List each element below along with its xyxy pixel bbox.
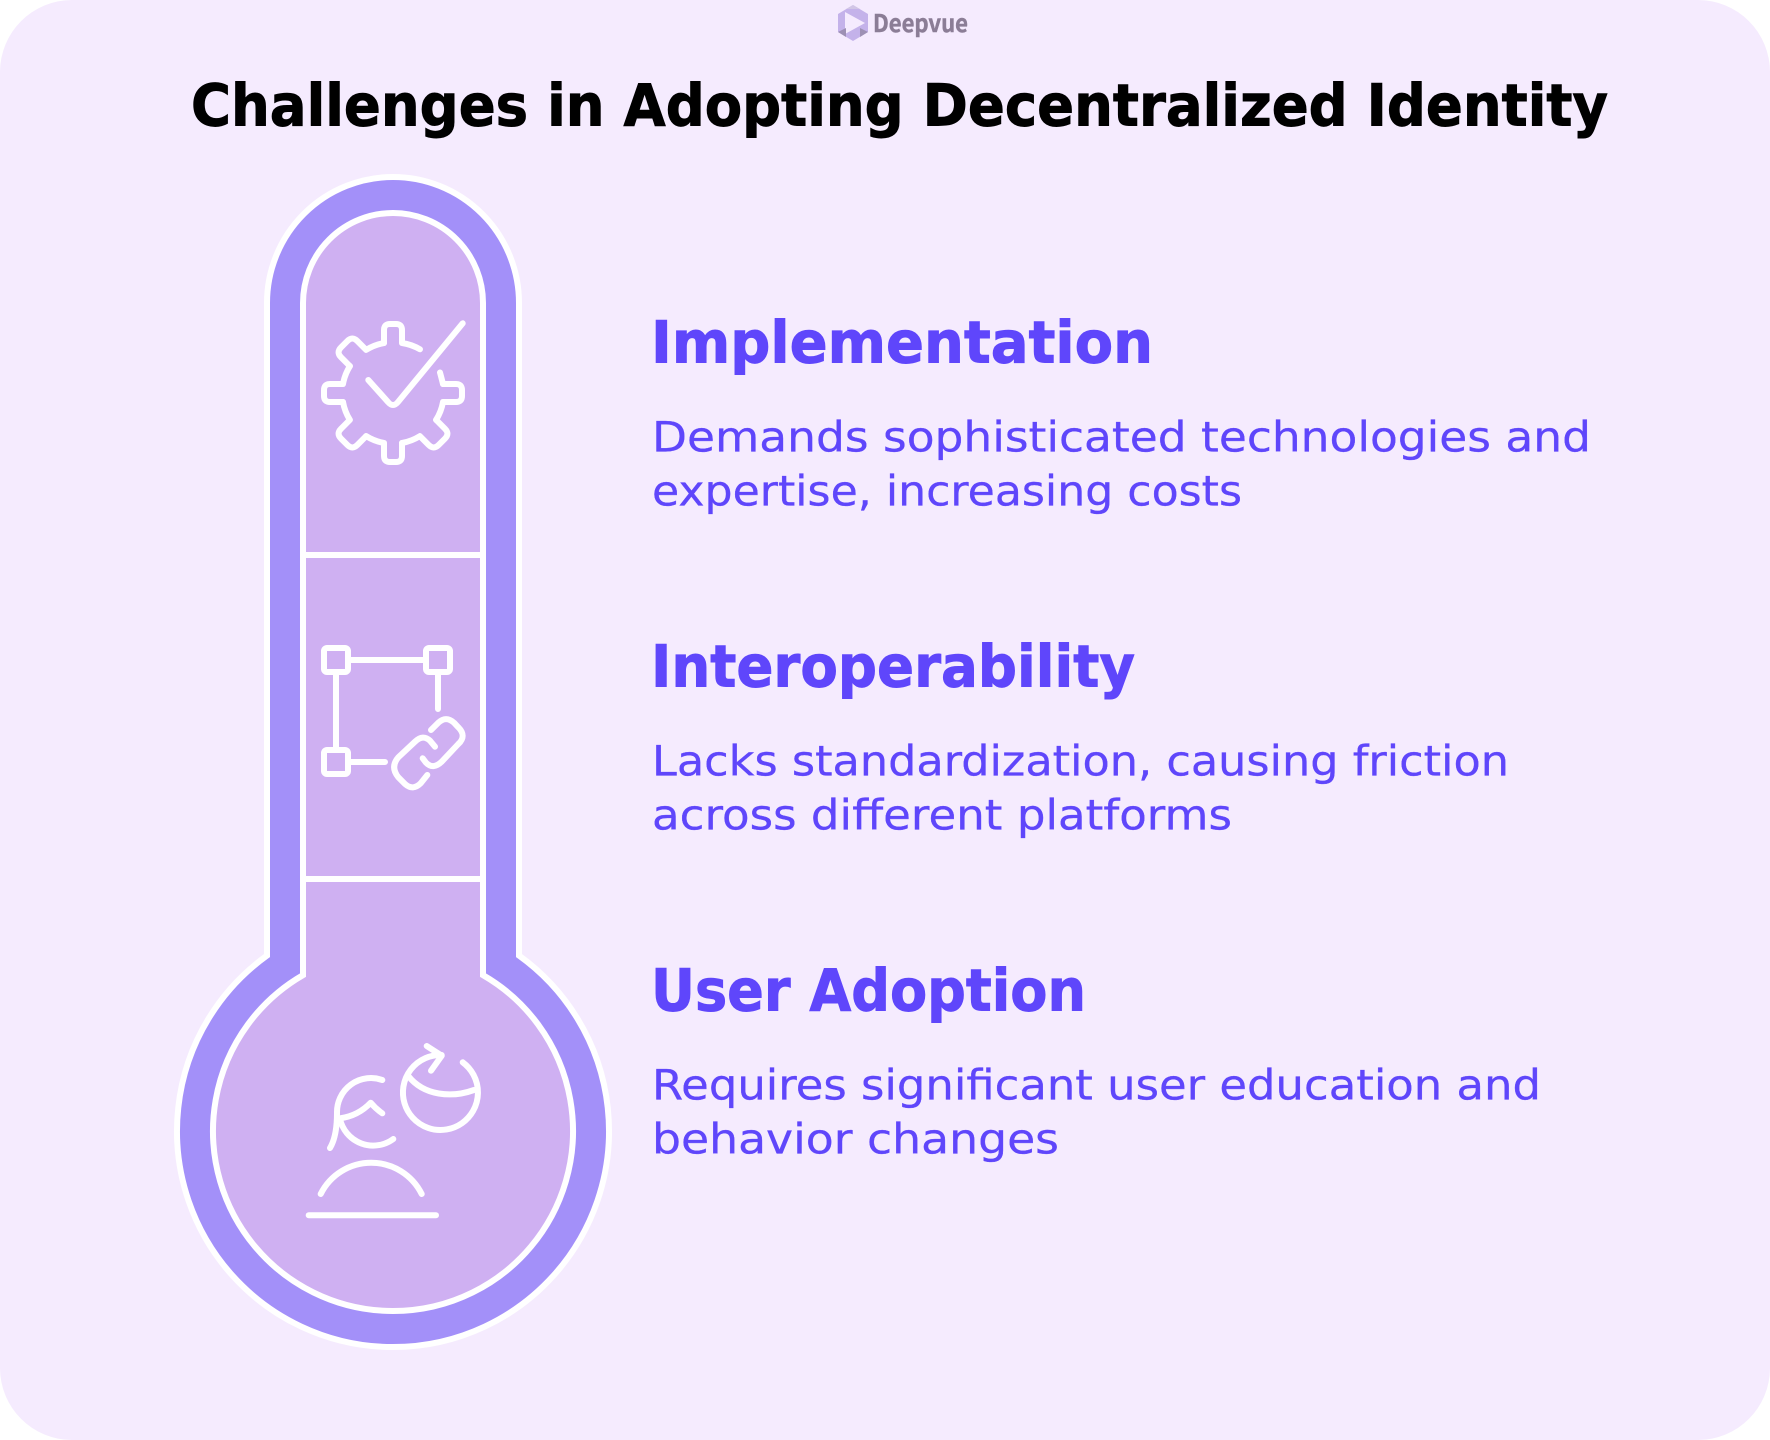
- thermometer inner fill: [213, 213, 573, 1311]
- title: Challenges in Adopting Decentralized Identity: [191, 72, 1608, 140]
- description: Interoperability: across different platforms: [652, 791, 1232, 840]
- thermometer diagram: [177, 177, 609, 1347]
- text block: Interoperability: [651, 633, 1509, 840]
- heading: Implementation: Implementation: [651, 309, 1153, 377]
- divider: segment 1 and 2: [303, 552, 483, 558]
- icon: user with rotating globe: [309, 1046, 478, 1215]
- logo: Deepvue: [838, 4, 968, 41]
- text block: User Adoption: [651, 957, 1541, 1164]
- description: User Adoption: behavior changes: [652, 1115, 1059, 1164]
- description: User Adoption: Requires significant user education and: [652, 1061, 1541, 1110]
- icon: nodes with chain link: [324, 648, 463, 787]
- thermometer outer shell: [177, 177, 609, 1347]
- icon: gear with check mark: [324, 323, 463, 462]
- text block: Implementation: [651, 309, 1591, 516]
- logo wordmark: Deepvue: [873, 4, 968, 39]
- divider: segment 2 and 3: [303, 876, 483, 882]
- description: Implementation: Demands sophisticated technologies and: [652, 413, 1591, 462]
- heading: Interoperability: Interoperability: [651, 633, 1135, 701]
- icon: Deepvue hexagon: [838, 5, 868, 41]
- heading: User Adoption: User Adoption: [651, 957, 1086, 1025]
- description: Implementation: expertise, increasing costs: [652, 467, 1242, 516]
- description: Interoperability: Lacks standardization, causing friction: [652, 737, 1509, 786]
